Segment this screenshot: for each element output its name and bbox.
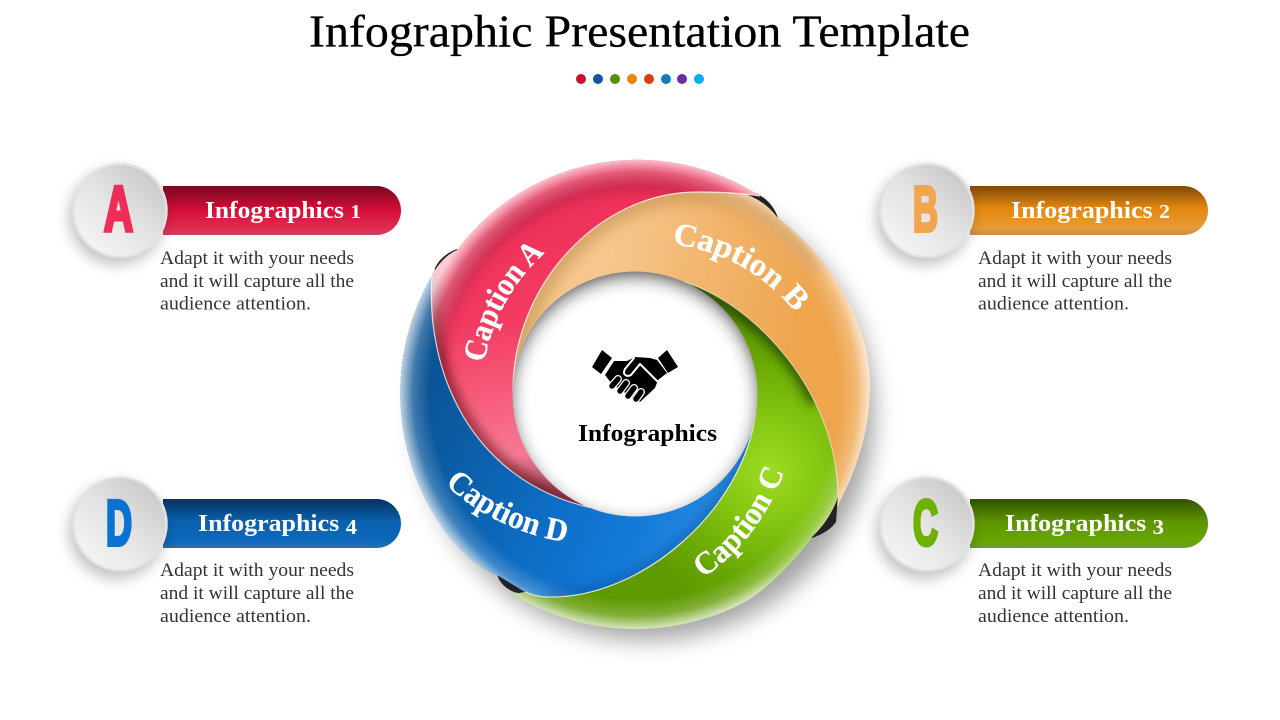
banner pill <box>970 499 1208 548</box>
badge letter A: A <box>104 173 133 245</box>
badge disc <box>74 164 166 257</box>
body text: audience attention. <box>160 294 311 314</box>
badge shadow <box>69 483 165 579</box>
banner label: 3 <box>1153 515 1164 539</box>
ribbon captions: Caption D <box>450 472 567 541</box>
badge shadow <box>876 483 972 579</box>
icon: handshake <box>592 350 678 402</box>
ribbon highlight edges <box>431 192 838 597</box>
badge shadow <box>876 169 972 265</box>
ring: swirl of four ribbons <box>400 160 870 630</box>
centre hole with inner shadow <box>512 272 758 516</box>
body text: Adapt it with your needs <box>978 561 1172 581</box>
banner label: Infographics 2 <box>1011 198 1170 224</box>
decorative colour dots <box>576 74 704 84</box>
ribbon captions: Caption B <box>675 224 808 310</box>
body text: Adapt it with your needs <box>160 249 354 269</box>
banner label: Infographics <box>198 511 329 537</box>
body text: audience attention. <box>160 607 311 627</box>
body text: and it will capture all the <box>978 272 1172 292</box>
ring drop shadow <box>418 184 874 640</box>
body text: audience attention. <box>978 294 1129 314</box>
body text: Adapt it with your needs <box>978 249 1172 269</box>
ribbon: red, Caption A <box>432 160 760 506</box>
body text: Adapt it with your needs <box>160 561 354 581</box>
ribbon captions: Caption A <box>465 244 545 360</box>
banner pill <box>163 499 401 548</box>
banner label: Infographics 1 <box>205 198 361 224</box>
centre label: Infographics <box>578 421 717 447</box>
panel: Infographics 4 <box>69 478 401 627</box>
body text <box>978 561 1172 627</box>
banner pill <box>970 186 1208 235</box>
badge disc <box>880 478 974 570</box>
ribbon: blue, Caption D <box>400 272 754 598</box>
badge letter D: D <box>106 487 132 559</box>
banner pill <box>163 186 401 235</box>
body text: and it will capture all the <box>160 272 354 292</box>
ribbon captions <box>450 224 808 574</box>
panel: Infographics 2 <box>876 164 1208 314</box>
banner label: Infographics <box>1005 511 1136 537</box>
ribbon: green, Caption C <box>513 282 838 630</box>
panel: Infographics 1 <box>69 164 401 314</box>
banner label: 4 <box>346 515 358 539</box>
body text <box>978 249 1172 314</box>
ribbon captions: Caption C <box>695 466 783 574</box>
badge disc <box>74 478 166 570</box>
badge disc <box>880 164 974 257</box>
body text <box>160 561 354 627</box>
black folded corners <box>431 192 838 596</box>
panel: Infographics 3 <box>876 478 1208 627</box>
badge letter C: C <box>913 487 938 559</box>
body text: audience attention. <box>978 607 1129 627</box>
body text <box>160 249 354 314</box>
ribbon: orange, Caption B <box>514 192 870 507</box>
badge shadow <box>69 169 165 265</box>
badge letter B: B <box>913 173 938 245</box>
body text: and it will capture all the <box>978 584 1172 604</box>
title: Infographic Presentation Template <box>309 6 970 56</box>
body text: and it will capture all the <box>160 584 354 604</box>
